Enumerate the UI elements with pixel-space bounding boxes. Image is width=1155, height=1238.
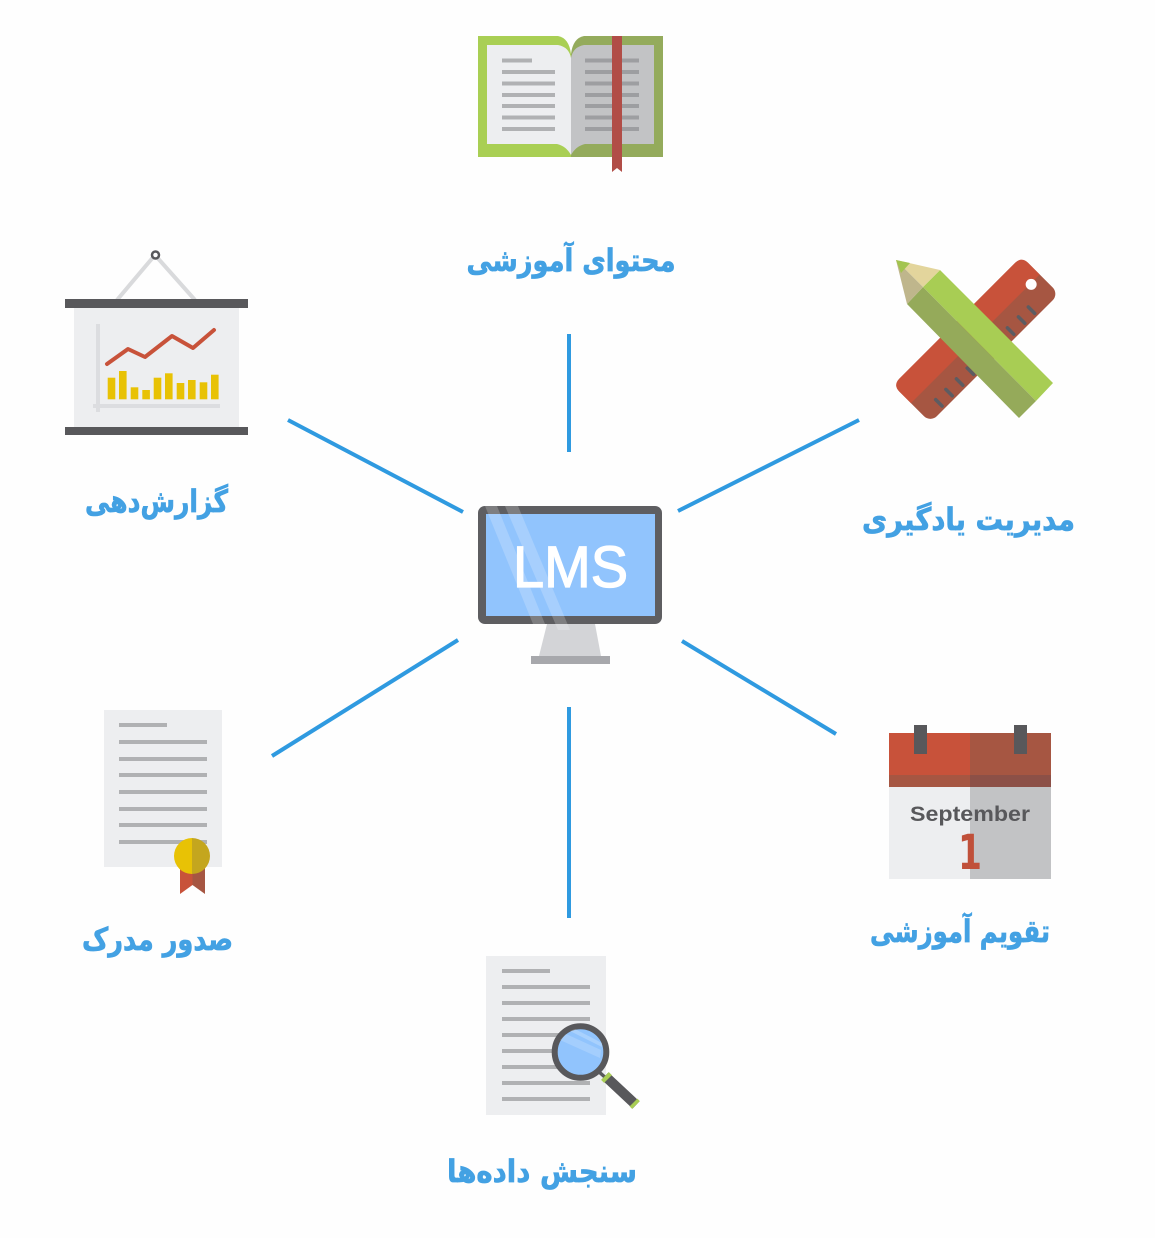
label: academic calendar: تقویم آموزشی [870,912,1050,950]
label: educational content: محتوای آموزشی [466,241,676,279]
icon: presentation board [65,252,248,435]
label: data assessment: سنجش داده‌ها [447,1154,637,1190]
connector lines [272,334,859,918]
icon: certificate [104,710,222,894]
calendar month: September [910,803,1030,826]
icon: LMS monitor [478,506,662,664]
calendar day: 1 [958,825,982,881]
label: certificate issuance: صدور مدرک [82,922,233,958]
label: learning management: مدیریت یادگیری [862,501,1075,538]
label: reporting: گزارش‌دهی [85,483,229,520]
icon: document with magnifier [486,956,636,1115]
icon: open book [478,36,663,172]
icon: pencil [896,260,1053,418]
icon: ruler [893,256,1059,423]
LMS heading: LMS [513,535,628,600]
icon: calendar [889,725,1051,881]
icon: pencil and ruler [893,256,1059,423]
